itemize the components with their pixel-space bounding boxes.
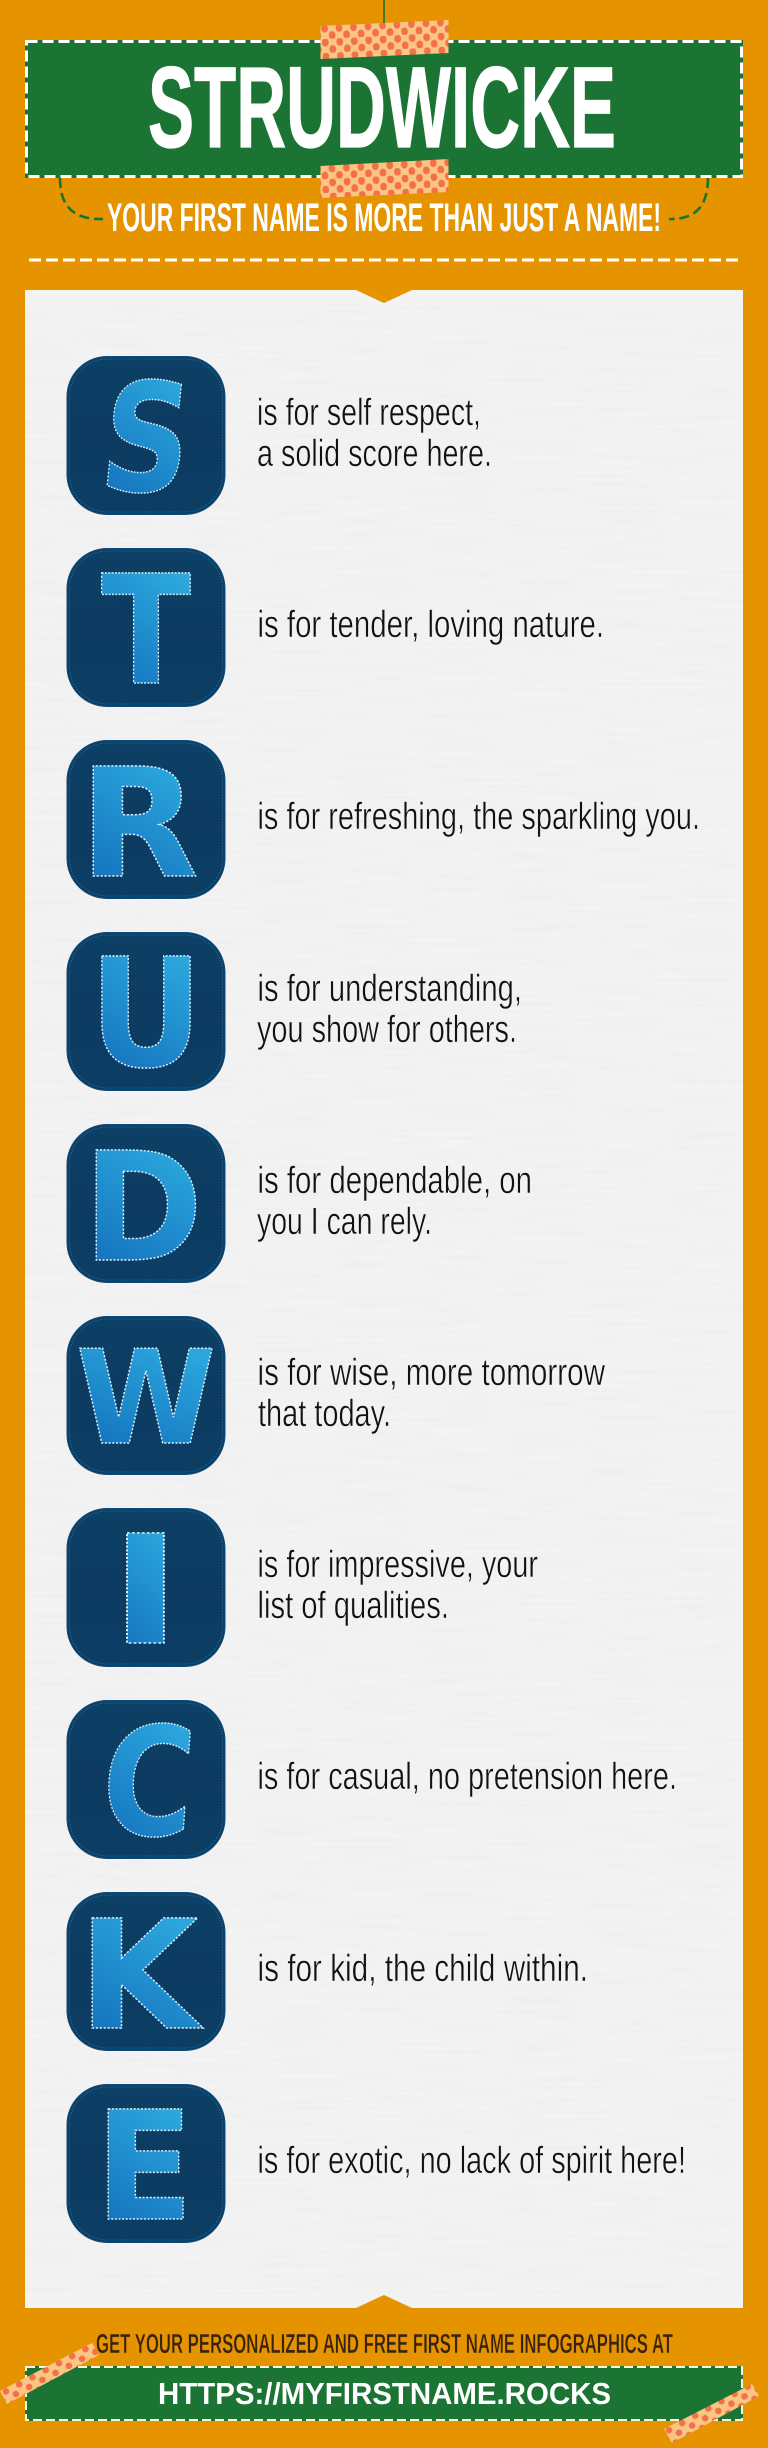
url: HTTPS://MYFIRSTNAME.ROCKS [158,2376,611,2411]
text: U meaning [257,968,522,1051]
footer banner [25,2366,743,2421]
icon: letter D: D [83,1120,203,1296]
text: S meaning: a solid score here. [257,433,492,475]
tape: top of banner [320,20,448,59]
row: R [67,736,700,912]
connector: right dashed curve [669,178,708,219]
text: W meaning [258,1352,605,1435]
icon: letter S: S [93,350,200,527]
row: W [67,1316,605,1474]
tape: footer left [0,2343,99,2404]
row: T [67,543,604,719]
text: D meaning: is for dependable, on [258,1160,532,1202]
icon: letter K: K [78,1888,204,2064]
icon: letter E: E [95,2079,194,2255]
text: I meaning: list of qualities. [258,1585,449,1627]
icon: letter U: U [89,926,203,1102]
text: U meaning: is for understanding, [258,968,522,1010]
text: T meaning: is for tender, loving nature. [258,604,604,646]
row: D [67,1120,532,1296]
icon: letter T [67,543,225,719]
row: C [67,1695,677,1871]
text: D meaning: you I can rely. [257,1201,432,1243]
icon: letter C: C [96,1695,201,1871]
panel: name letters [25,290,743,2308]
tape: footer right [664,2384,759,2443]
tape: bottom of banner [320,159,448,198]
text: W meaning: that today. [258,1393,391,1435]
text: S meaning: is for self respect, [257,392,481,434]
text: K meaning: is for kid, the child within. [258,1948,588,1990]
header banner [25,40,743,178]
row: E [67,2079,686,2255]
row: I [67,1503,538,1679]
icon: letter E [67,2079,225,2255]
text: I meaning [258,1544,538,1627]
text: I meaning: is for impressive, your [258,1544,538,1586]
text: D meaning [257,1160,532,1243]
connector: left dashed curve [60,178,103,219]
hanging line above top tape [383,0,385,26]
text: S meaning [257,392,492,475]
row: K [67,1888,588,2064]
icon: letter I [67,1503,225,1679]
icon: letter T: T [101,543,191,719]
row: S [67,350,492,527]
text: U meaning: you show for others. [257,1009,517,1051]
icon: letter R: R [79,736,199,912]
text: W meaning: is for wise, more tomorrow [258,1352,605,1394]
dashed separator [29,258,739,262]
row: U [67,926,522,1102]
icon: letter I: I [109,1503,182,1679]
icon: letter W: W [76,1322,216,1474]
